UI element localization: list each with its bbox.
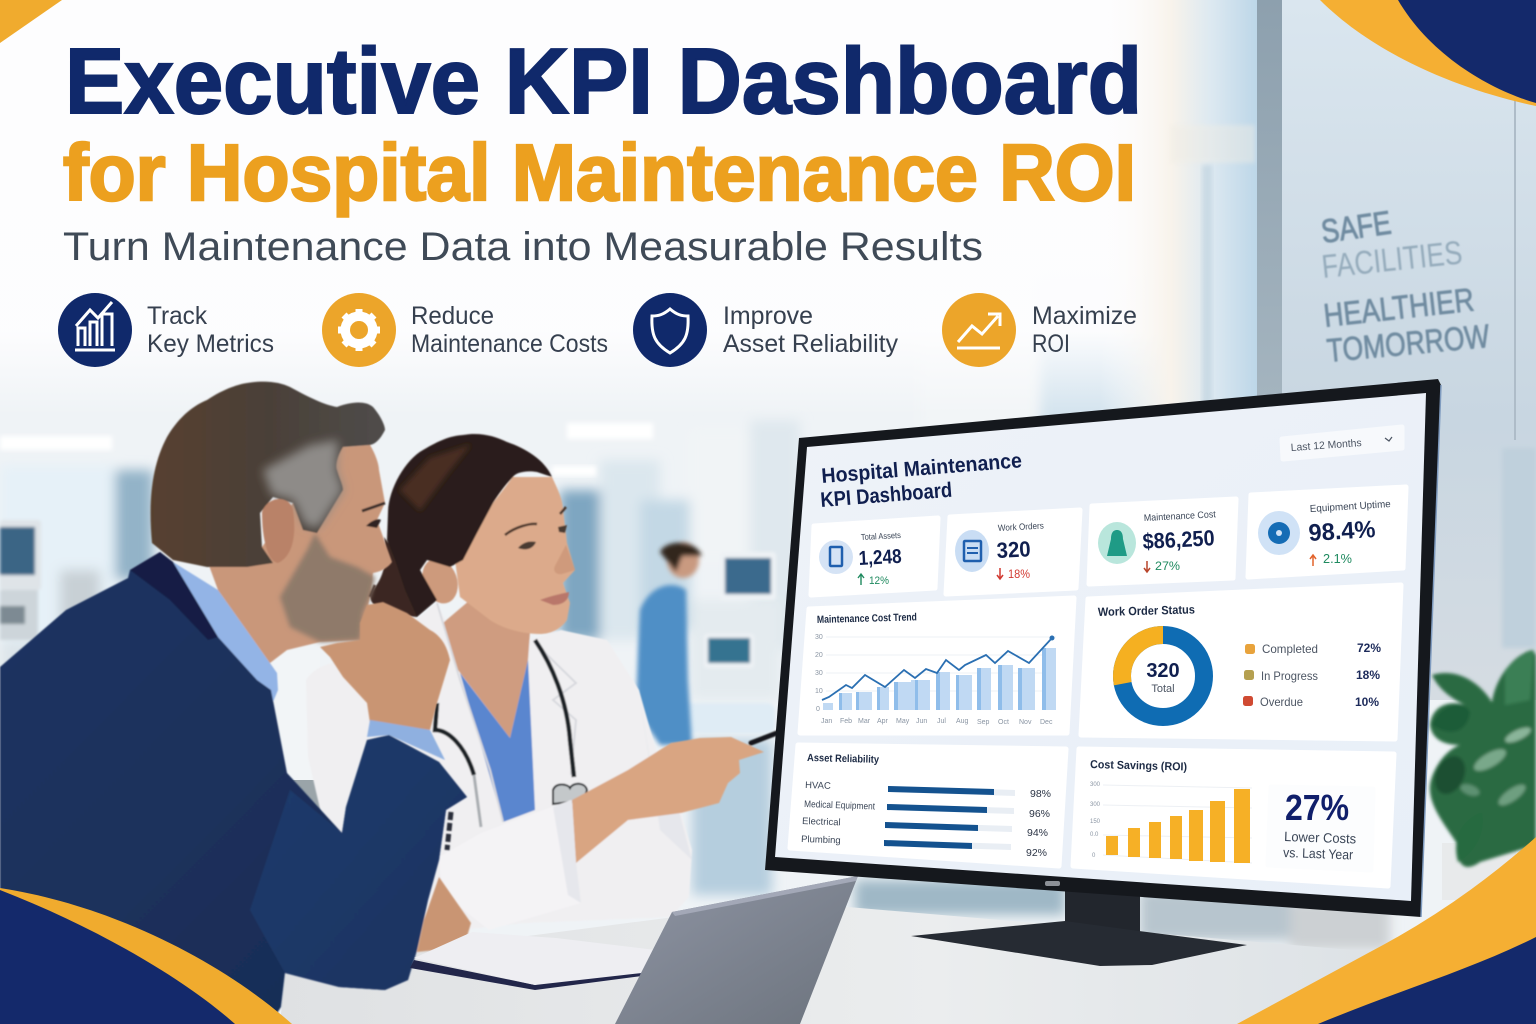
KPI card: equipment uptime: Equipment Uptime	[1310, 499, 1391, 515]
scrubs	[460, 660, 535, 822]
benefit: maximize ROI	[942, 293, 1137, 367]
axis labels: Aug	[956, 718, 969, 725]
screen	[775, 393, 1426, 901]
corner accent: top right	[1320, 0, 1536, 106]
hair	[151, 382, 385, 567]
axis labels: Jul	[937, 718, 946, 725]
axis labels: Feb	[840, 718, 852, 725]
KPI card: total assets	[811, 518, 938, 595]
KPI card: total assets: 12%	[869, 575, 889, 587]
legend: 10%	[1355, 695, 1379, 709]
savings bar chart: 0	[1092, 853, 1096, 859]
KPI card: work orders: Work Orders	[998, 521, 1044, 533]
corner accent: bottom left	[0, 888, 292, 1024]
other hand	[417, 877, 471, 952]
jacket torso	[0, 552, 467, 1024]
face features	[505, 507, 575, 605]
axis labels: Jun	[916, 718, 927, 725]
KPI card: work orders: 18%	[1008, 567, 1030, 581]
lab coat	[306, 603, 692, 930]
stethoscope	[435, 640, 574, 777]
KPI card: maintenance cost: Maintenance Cost	[1144, 509, 1216, 524]
axis labels: Sep	[977, 719, 990, 726]
axis labels: Jan	[821, 718, 832, 725]
sleeve buttons	[447, 812, 451, 850]
benefit: maximize ROI: Maximize	[1032, 302, 1137, 330]
monitor stand	[911, 890, 1247, 966]
benefit: track key metrics: Key Metrics	[147, 330, 274, 358]
benefit: improve asset reliability: Asset Reliability	[723, 330, 898, 358]
shirt cuff	[367, 720, 445, 760]
ear	[262, 499, 294, 563]
reliability bars	[884, 786, 1015, 850]
panel: cost savings ROI	[1073, 749, 1394, 886]
benefit: track key metrics	[58, 293, 274, 367]
chest piece	[553, 784, 587, 804]
donut chart	[1122, 635, 1204, 717]
reliability values: 96%	[1029, 808, 1050, 820]
logo	[1045, 881, 1060, 886]
title	[63, 29, 1142, 217]
background: equipment monitors	[0, 520, 776, 733]
area bars	[823, 648, 1056, 710]
KPI card: equipment uptime: 2.1%	[1323, 551, 1352, 566]
face features	[362, 503, 385, 597]
trend line	[822, 638, 1052, 700]
row labels: Plumbing	[801, 834, 841, 846]
row labels: Medical Equipment	[804, 799, 876, 812]
glass wall panel with wall lettering: TOMORROW	[1325, 317, 1492, 369]
legend: In Progress	[1261, 669, 1318, 683]
corner accent: top left	[0, 0, 62, 43]
legend: Completed	[1262, 642, 1318, 656]
subtitle: Turn Maintenance Data into Measurable Results	[63, 225, 983, 269]
monitor	[765, 379, 1441, 917]
benefit: track key metrics: Track	[147, 302, 207, 330]
corner accent: bottom right	[1237, 837, 1536, 1024]
axis labels: 20	[815, 652, 823, 659]
donut chart: Total	[1151, 683, 1175, 695]
desk	[280, 907, 1375, 1024]
savings bar chart: 0.0	[1090, 832, 1099, 838]
neck	[443, 600, 530, 738]
KPI card: total assets: 1,248	[858, 546, 902, 570]
background: bright window beside the pillar	[1100, 0, 1258, 420]
row labels: Electrical	[802, 816, 841, 828]
laptop	[615, 876, 858, 1024]
savings callout: Lower Costs	[1284, 829, 1357, 847]
legend: 72%	[1357, 641, 1381, 655]
background: white wash behind the title	[0, 0, 1257, 415]
background nurse	[636, 542, 702, 745]
KPI card: work orders	[946, 510, 1080, 594]
coat lapel lines	[437, 603, 576, 822]
axis labels: 0	[816, 706, 820, 713]
ear	[416, 554, 464, 608]
dashboard heading	[820, 449, 1023, 512]
benefit: improve asset reliability: Improve	[723, 302, 813, 330]
savings bar chart: 300	[1090, 782, 1101, 788]
KPI card: total assets: Total Assets	[861, 530, 901, 542]
axis labels: Mar	[858, 718, 871, 725]
KPI card: maintenance cost: 27%	[1155, 559, 1180, 573]
title: Executive KPI Dashboard	[65, 29, 1142, 133]
KPI card: equipment uptime	[1248, 487, 1406, 577]
savings bar chart	[1090, 782, 1252, 863]
panel: work order status	[1081, 585, 1401, 739]
panel: asset reliability: Asset Reliability	[807, 752, 879, 766]
benefit: improve asset reliability	[633, 293, 898, 367]
axis labels: Nov	[1019, 719, 1032, 726]
row labels	[801, 780, 876, 846]
axis labels: Oct	[998, 719, 1009, 726]
panel: maintenance cost trend	[800, 598, 1074, 733]
savings bar chart: 150	[1090, 819, 1101, 825]
grid	[826, 637, 1056, 691]
savings callout: vs. Last Year	[1283, 845, 1354, 862]
legend	[1243, 641, 1381, 709]
legend: Overdue	[1260, 695, 1303, 709]
glass wall panel with wall lettering	[1257, 0, 1536, 700]
legend: 18%	[1356, 668, 1380, 682]
KPI card: equipment uptime: 98.4%	[1308, 516, 1376, 547]
date dropdown	[1282, 427, 1402, 459]
glass wall panel with wall lettering: SAFE	[1319, 204, 1393, 250]
glass wall panel with wall lettering: FACILITIES	[1320, 233, 1464, 285]
face	[455, 477, 575, 634]
axis labels: Apr	[877, 718, 889, 725]
pen	[751, 718, 816, 743]
axis labels: Dec	[1040, 719, 1053, 726]
reliability values: 94%	[1027, 827, 1048, 839]
hair	[387, 434, 552, 617]
KPI card: maintenance cost: $86,250	[1142, 525, 1215, 554]
glass wall panel with wall lettering: HEALTHIER	[1322, 281, 1476, 334]
gray hair highlight	[263, 440, 343, 528]
woman doctor	[306, 434, 816, 930]
forearm	[572, 737, 764, 863]
KPI card: maintenance cost	[1089, 499, 1236, 584]
sleeve	[439, 800, 581, 930]
date dropdown: Last 12 Months	[1290, 437, 1362, 454]
panel: cost savings ROI: Cost Savings (ROI)	[1090, 759, 1187, 774]
benefit: maximize ROI: ROI	[1032, 330, 1070, 358]
face and neck	[207, 445, 392, 673]
benefit: reduce maintenance costs: Maintenance Costs	[411, 330, 608, 358]
savings bar chart: 300	[1090, 802, 1101, 808]
axis labels: 30	[815, 634, 823, 641]
savings callout	[1268, 787, 1373, 870]
benefit: reduce maintenance costs: Reduce	[411, 302, 494, 330]
panel: work order status: Work Order Status	[1098, 602, 1195, 619]
benefit: reduce maintenance costs	[322, 293, 608, 367]
axis labels: May	[896, 718, 910, 725]
plant	[1429, 650, 1536, 867]
title: for Hospital Maintenance ROI	[63, 128, 1136, 217]
man in suit	[0, 382, 471, 1024]
axis labels	[815, 634, 1053, 726]
jacket sleeve	[250, 735, 467, 990]
jacket lapel	[130, 552, 218, 640]
reliability values	[1026, 788, 1051, 859]
KPI card: work orders: 320	[996, 536, 1031, 563]
hand on chin	[320, 602, 450, 730]
donut chart: 320	[1146, 660, 1180, 682]
axis labels: 30	[815, 670, 823, 677]
shirt	[173, 562, 278, 702]
notebook	[410, 932, 656, 990]
axis labels: 10	[815, 688, 823, 695]
bezel	[765, 379, 1441, 917]
savings callout: 27%	[1285, 787, 1349, 828]
dashboard heading: Hospital Maintenance	[821, 449, 1023, 488]
reliability values: 92%	[1026, 847, 1047, 859]
row labels: HVAC	[805, 780, 831, 792]
dashboard heading: KPI Dashboard	[820, 479, 953, 512]
panel: asset reliability	[790, 745, 1066, 866]
plant pot	[1442, 843, 1516, 900]
panel: maintenance cost trend: Maintenance Cost Trend	[817, 611, 917, 626]
reliability values: 98%	[1030, 788, 1051, 800]
beard	[280, 533, 375, 642]
ponytail hair behind	[370, 537, 420, 617]
